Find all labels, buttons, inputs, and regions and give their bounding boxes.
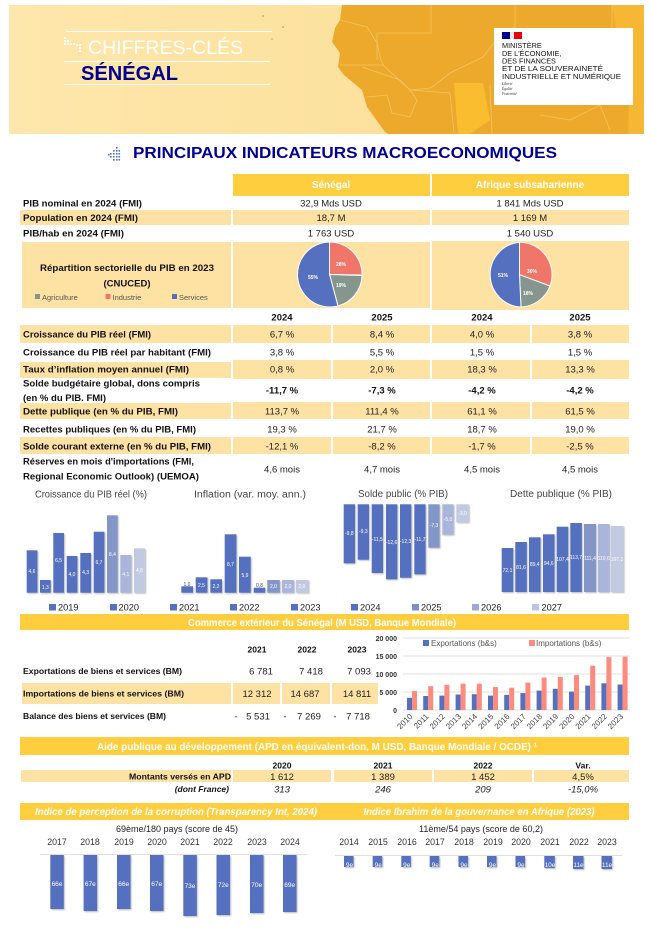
row: croissance par habitant: Croissance du PIB réel par habitant (FMI)	[23, 348, 211, 358]
chart: governance rank: 11e	[573, 862, 584, 869]
ministry name: INDUSTRIELLE ET NUMÉRIQUE	[502, 72, 621, 81]
row: solde budgétaire: -4,2 %	[566, 386, 594, 396]
APD table: 2022	[474, 760, 493, 770]
section band: Aide publique au développement (APD en équivalent-don, M USD, Banque Mondiale / OCDE) ¹	[97, 742, 538, 753]
legend: sectors: Services	[179, 293, 208, 302]
trade table: 14 687	[290, 689, 320, 700]
chart: solde public: -9,3	[359, 529, 368, 535]
icon: title dots	[108, 147, 120, 161]
trade table: 2022	[298, 644, 317, 654]
row: réserves: Réserves en mois d'importations (FMI,	[23, 456, 194, 468]
title: PRINCIPAUX INDICATEURS MACROECONOMIQUES	[133, 145, 557, 162]
chart: solde public: -12,3	[400, 539, 412, 545]
row: croissance: 4,0 %	[470, 330, 495, 340]
APD table: 1 612	[270, 772, 294, 783]
chart: solde public: -3,0	[458, 511, 467, 517]
chart legend: Exportations (b&s)	[431, 639, 497, 648]
row: PIB par habitant	[23, 228, 553, 240]
row: recettes	[23, 424, 595, 436]
icon: republic flag	[502, 32, 522, 39]
chart: croissance du PIB réel: 4,6	[29, 569, 36, 575]
row: solde budgétaire: Solde budgétaire global, dons compris	[23, 378, 200, 390]
pie chart: Afrique subsaharienne: 18%	[523, 291, 534, 297]
APD table	[21, 760, 629, 796]
legend: sectors: Agriculture	[42, 293, 78, 302]
trade table: Balance des biens et services (BM)	[23, 711, 166, 721]
row: recettes: 21,7 %	[367, 424, 397, 436]
row: dette: Dette publique (en % du PIB, FMI)	[23, 406, 178, 418]
chart: corruption rank: 67e	[85, 881, 96, 888]
row: réserves: Regional Economic Outlook) (UEMOA)	[23, 472, 199, 482]
chart: governance rank: 2014	[339, 837, 359, 847]
chart: dette publique: 94,6	[544, 561, 554, 567]
header rules	[64, 32, 272, 84]
chart: inflation: 2,2	[213, 584, 220, 590]
row: solde budgétaire: -4,2 %	[468, 386, 496, 396]
chart: solde public: -7,3	[430, 523, 439, 529]
chart: corruption rank: 66e	[118, 881, 130, 888]
APD table: Montants versés en APD	[129, 772, 231, 782]
row: croissance par habitant: 3,8 %	[270, 348, 295, 358]
chart: governance rank	[335, 837, 622, 869]
chart: exports and imports: 15 000	[376, 654, 397, 661]
trade table	[22, 644, 378, 722]
row: PIB par habitant: 1 540 USD	[507, 228, 553, 240]
APD table: 313	[274, 784, 291, 796]
heading: sector breakdown: Répartition sectorielle du PIB en 2023	[40, 263, 214, 274]
row: solde courant: -1,7 %	[468, 442, 496, 452]
pie chart: Sénégal: 28%	[336, 262, 347, 268]
row: recettes: 19,0 %	[565, 424, 595, 436]
table header: Sénégal	[312, 180, 350, 191]
row: solde courant: -12,1 %	[266, 442, 299, 452]
chart: croissance du PIB réel: 4,3	[82, 570, 89, 576]
pie chart: Afrique subsaharienne	[490, 242, 552, 307]
trade table: 2021	[248, 644, 267, 654]
trade table: 14 811	[343, 689, 371, 700]
chart: corruption rank: 2023	[247, 837, 267, 847]
chart: governance rank: 9e	[403, 862, 411, 869]
row: solde budgétaire: (en % du PIB. FMI)	[23, 393, 106, 404]
trade table: 7 269	[297, 712, 321, 722]
row: PIB nominal: 1 841 Mds USD	[496, 198, 564, 210]
trade table: 7 418	[299, 666, 323, 678]
row: croissance par habitant: 5,5 %	[370, 348, 395, 358]
chart: exports and imports: 2023	[606, 712, 625, 731]
legend: chart years: 2021	[179, 602, 199, 612]
chart: governance rank: 2018	[454, 837, 474, 847]
chart: solde public: -5,0	[444, 517, 453, 523]
chart: exports and imports: 2014	[460, 712, 480, 731]
chart: exports and imports: 2021	[574, 712, 593, 731]
row: inflation: 13,3 %	[565, 364, 595, 376]
row: recettes: 18,7 %	[467, 424, 497, 436]
row: PIB par habitant: 1 763 USD	[308, 228, 354, 240]
row: solde budgétaire	[23, 378, 594, 404]
APD table: 209	[474, 784, 492, 796]
chart: governance rank: 2015	[368, 837, 388, 847]
heading: sector breakdown: (CNUCED)	[104, 278, 150, 290]
rank caption: 11ème/54 pays (score de 60,2)	[419, 824, 543, 834]
chart: governance rank: 9e	[375, 862, 382, 869]
chart: solde public: -11,7	[414, 537, 426, 543]
chart: dette publique	[502, 489, 624, 592]
chart: governance rank: 2020	[511, 837, 531, 847]
chart: inflation: 2,5	[198, 583, 205, 589]
chart title: Inflation (var. moy. ann.)	[194, 490, 306, 500]
chart: corruption rank: 2017	[47, 837, 67, 847]
chart legend: Importations (b&s)	[536, 639, 602, 648]
chart: inflation: 5,9	[242, 573, 249, 579]
trade table: Importations de biens et services (BM)	[23, 688, 184, 698]
row: croissance: 3,8 %	[568, 330, 593, 340]
motto: Liberté	[501, 82, 513, 86]
legend: sectors	[35, 293, 208, 302]
row: croissance par habitant: 1,5 %	[470, 348, 495, 358]
ministry name: MINISTÈRE	[502, 41, 542, 50]
chart: corruption rank: 70e	[251, 882, 263, 889]
chart: governance rank: 2023	[597, 837, 617, 847]
panel: Ibrahim governance index	[330, 803, 629, 869]
chart: dette publique: 113,7	[570, 555, 582, 561]
chart: croissance du PIB réel: 6,7	[96, 560, 103, 566]
row: PIB nominal: 32,9 Mds USD	[300, 198, 362, 210]
chart: exports and imports: 2016	[493, 712, 512, 731]
chart: exports and imports: 2015	[476, 712, 496, 731]
chart: governance rank: 2016	[397, 837, 417, 847]
ministry name: DES FINANCES	[502, 56, 556, 66]
motto	[501, 82, 517, 96]
APD table: 246	[374, 784, 392, 796]
pie chart: Afrique subsaharienne: 51%	[498, 273, 509, 279]
row: population	[20, 210, 629, 225]
row: dette: 61,5 %	[565, 406, 595, 418]
section band	[20, 737, 629, 755]
row: years: 2025	[371, 312, 393, 324]
row: population: 1 169 M	[513, 213, 547, 224]
row: réserves: 4,5 mois	[464, 464, 500, 476]
APD table: 2020	[273, 760, 292, 770]
row: PIB nominal: PIB nominal en 2024 (FMI)	[23, 198, 142, 210]
section band	[330, 803, 629, 820]
chart: croissance du PIB réel: 4,1	[122, 572, 129, 578]
legend: chart years: 2019	[58, 602, 78, 612]
trade table: -	[283, 712, 287, 722]
legend: chart years: 2024	[360, 602, 380, 612]
chart: corruption rank: 2022	[213, 837, 233, 847]
section band	[20, 614, 629, 630]
panel: corruption index	[20, 803, 330, 916]
chart title: Croissance du PIB réel (%)	[35, 490, 147, 500]
chart: governance rank: 2019	[483, 837, 503, 847]
chart: croissance du PIB réel: 4,8	[136, 568, 143, 574]
chart: croissance du PIB réel: 4,0	[69, 572, 76, 578]
chart: corruption rank: 2021	[180, 837, 200, 847]
chart: governance rank: 11e	[602, 862, 613, 869]
chart: corruption rank: 2020	[147, 837, 167, 847]
chart: dette publique: 89,4	[530, 562, 540, 568]
row: inflation	[20, 360, 629, 379]
trade table: 5 531	[246, 712, 270, 722]
chart: dette publique: 110,6	[598, 556, 610, 562]
logo ministère	[494, 28, 633, 105]
motto: Égalité	[501, 86, 513, 91]
chart: croissance du PIB réel: 6,5	[55, 558, 62, 564]
row: solde courant	[20, 437, 629, 454]
panel: macro indicators table	[20, 312, 629, 482]
row: inflation: Taux d’inflation moyen annuel (FMI)	[23, 364, 189, 376]
chart: croissance du PIB réel: 1,3	[42, 585, 49, 591]
row: réserves: 4,5 mois	[562, 464, 598, 476]
row: croissance	[20, 325, 629, 343]
table header: Afrique subsaharienne	[476, 180, 585, 191]
row: croissance: 6,7 %	[270, 330, 295, 340]
trade table: Exportations de biens et services (BM)	[23, 666, 182, 676]
row: réserves: 4,7 mois	[364, 464, 400, 476]
row: dette	[20, 402, 629, 419]
legend: chart years: 2025	[421, 602, 441, 612]
ministry name: ET DE LA SOUVERAINETÉ	[502, 64, 603, 73]
rank caption: 69ème/180 pays (score de 45)	[116, 824, 238, 834]
pie chart: Afrique subsaharienne: 30%	[527, 269, 538, 275]
chart: governance rank: 9e	[517, 862, 525, 869]
chart: exports and imports: 2012	[428, 712, 447, 731]
section band: Commerce extérieur du Sénégal (M USD, Banque Mondiale)	[188, 618, 456, 629]
trade table: -	[333, 712, 337, 722]
chart legend	[423, 639, 602, 648]
row: inflation: 0,8 %	[270, 364, 295, 376]
row: inflation: 2,0 %	[370, 364, 395, 376]
row: recettes: 19,3 %	[267, 424, 297, 436]
chart title: Solde public (% PIB)	[358, 489, 448, 500]
chart: exports and imports: 2022	[590, 712, 609, 731]
chart: governance rank: 2022	[569, 837, 589, 847]
pie chart: Sénégal	[298, 242, 362, 307]
chart: dette publique: 107,1	[611, 557, 623, 563]
row: population: Population en 2024 (FMI)	[23, 213, 138, 224]
ministry name: DE L'ÉCONOMIE,	[502, 49, 561, 58]
chart: corruption rank: 73e	[185, 883, 196, 890]
row: dette: 113,7 %	[265, 406, 300, 418]
legend: chart years: 2027	[542, 602, 562, 612]
chart: governance rank: 9e	[489, 862, 496, 869]
legend: sectors: Industrie	[112, 293, 141, 302]
table header	[233, 174, 629, 196]
pie chart: Sénégal: 55%	[308, 275, 319, 281]
chart: exports and imports: 5 000	[379, 690, 397, 697]
row: PIB par habitant: PIB/hab en 2024 (FMI)	[23, 228, 124, 240]
heading: sector breakdown	[40, 263, 214, 290]
panel: sector breakdown	[22, 241, 629, 310]
chart: croissance du PIB réel: 8,4	[109, 552, 116, 558]
row: years: 2024	[471, 312, 493, 324]
chart: exports and imports: 2013	[444, 712, 463, 731]
ministry name	[502, 41, 621, 81]
map of West Africa	[262, 5, 644, 134]
trade table: 7 718	[346, 712, 370, 722]
chart: inflation: 2,0	[270, 584, 277, 590]
chart: corruption rank: 66e	[52, 881, 63, 888]
row: solde budgétaire: -11,7 %	[266, 386, 299, 396]
legend: chart years: 2023	[300, 602, 320, 612]
chart: corruption rank: 67e	[151, 881, 163, 888]
row: croissance par habitant	[23, 348, 593, 358]
chart: exports and imports: 0	[393, 708, 397, 715]
chart: dette publique: 81,6	[516, 565, 526, 571]
heading: chiffres-clés: CHIFFRES-CLÉS	[88, 38, 243, 59]
row: solde courant: -2,5 %	[566, 442, 594, 452]
motto: Fraternité	[501, 92, 517, 96]
chart title: Dette publique (% PIB)	[510, 489, 612, 500]
legend: chart years: 2020	[118, 602, 139, 612]
panel: aide publique au développement	[20, 737, 629, 796]
row: years: 2025	[569, 312, 591, 324]
row: inflation: 18,3 %	[467, 364, 497, 376]
chart: governance rank: 2017	[425, 837, 445, 847]
trade table: 2023	[348, 644, 367, 654]
chart: exports and imports: 2018	[525, 712, 544, 731]
chart: exports and imports: 2010	[395, 712, 415, 731]
row: years: 2024	[271, 312, 293, 324]
chart: inflation: 2,0	[299, 584, 306, 590]
row: recettes: Recettes publiques (en % du PIB, FMI)	[23, 424, 196, 436]
legend: chart years: 2026	[481, 602, 501, 612]
chart: governance rank: 9e	[460, 862, 468, 869]
icon: dotted pattern	[64, 37, 81, 52]
row: solde budgétaire: -7,3 %	[368, 386, 396, 396]
legend: chart years	[49, 602, 562, 612]
chart: solde public	[344, 489, 469, 579]
chart: corruption rank: 72e	[218, 882, 229, 889]
row: solde courant: -8,2 %	[368, 442, 396, 452]
chart: exports and imports: 2020	[557, 712, 577, 731]
chart: corruption rank: 2024	[280, 837, 300, 847]
chart: governance rank: 9e	[346, 862, 353, 869]
APD table: 1 452	[471, 772, 495, 783]
chart: croissance du PIB réel	[27, 490, 147, 593]
trade table: 6 781	[249, 666, 273, 678]
panel: commerce extérieur	[20, 614, 630, 731]
APD table: (dont France)	[175, 784, 229, 794]
legend: chart years: 2022	[239, 602, 259, 612]
chart: governance rank: 10e	[545, 862, 556, 869]
header banner	[9, 5, 644, 134]
chart: corruption rank: 2018	[80, 837, 100, 847]
row: croissance: Croissance du PIB réel (FMI)	[23, 330, 151, 340]
chart: solde public: -11,5	[372, 537, 383, 543]
chart: dette publique: 111,4	[584, 556, 596, 562]
chart: inflation: 2,0	[285, 584, 292, 590]
row: PIB nominal	[23, 198, 564, 210]
chart: governance rank: 9e	[432, 862, 439, 869]
row: solde courant: Solde courant externe (en % du PIB, FMI)	[23, 442, 211, 452]
trade table: 7 093	[347, 666, 371, 678]
chart: exports and imports: 2017	[509, 712, 528, 731]
chart: exports and imports: 20 000	[376, 636, 397, 643]
trade table: 12 312	[242, 689, 272, 700]
APD table: 1 389	[371, 772, 395, 783]
chart: corruption rank	[40, 837, 307, 916]
chart: dette publique: 107,4	[556, 557, 569, 563]
chart: solde public: -12,6	[386, 540, 398, 546]
chart: dette publique: 72,1	[503, 568, 513, 574]
APD table: 2021	[374, 760, 393, 770]
row: croissance par habitant: 1,5 %	[568, 348, 593, 358]
chart: inflation: 8,7	[227, 562, 234, 568]
chart: inflation	[181, 490, 308, 593]
section band: Indice de perception de la corruption (Transparency Int, 2024)	[35, 807, 318, 818]
row: réserves: 4,6 mois	[264, 464, 300, 476]
row: population: 18,7 M	[316, 213, 346, 224]
APD table: 4,5%	[572, 772, 594, 783]
trade table: -	[234, 712, 238, 722]
chart: exports and imports: 2019	[541, 712, 561, 731]
section band	[20, 803, 330, 820]
chart: exports and imports: 2011	[412, 712, 431, 731]
chart: inflation: 0,8	[256, 583, 263, 589]
chart: solde public: -9,8	[345, 531, 354, 537]
chart: exports and imports	[376, 636, 630, 731]
panel: general indicators table	[20, 174, 629, 310]
row: dette: 111,4 %	[365, 406, 399, 418]
heading: country: SÉNÉGAL	[81, 62, 178, 85]
row: years	[271, 312, 591, 324]
chart: governance rank: 2021	[540, 837, 560, 847]
chart: inflation: 1,0	[184, 582, 191, 588]
row: réserves	[23, 456, 598, 482]
chart: corruption rank: 69e	[284, 882, 296, 889]
chart: corruption rank: 2019	[114, 837, 134, 847]
pie chart: Sénégal: 19%	[336, 283, 347, 289]
row: croissance: 8,4 %	[370, 330, 395, 340]
chart: exports and imports: 10 000	[376, 672, 397, 679]
APD table: -15,0%	[568, 784, 599, 796]
row: dette: 61,1 %	[467, 406, 497, 418]
APD table: Var.	[575, 760, 591, 770]
section band: Indice Ibrahim de la gouvernance en Afrique (2023)	[364, 807, 595, 818]
